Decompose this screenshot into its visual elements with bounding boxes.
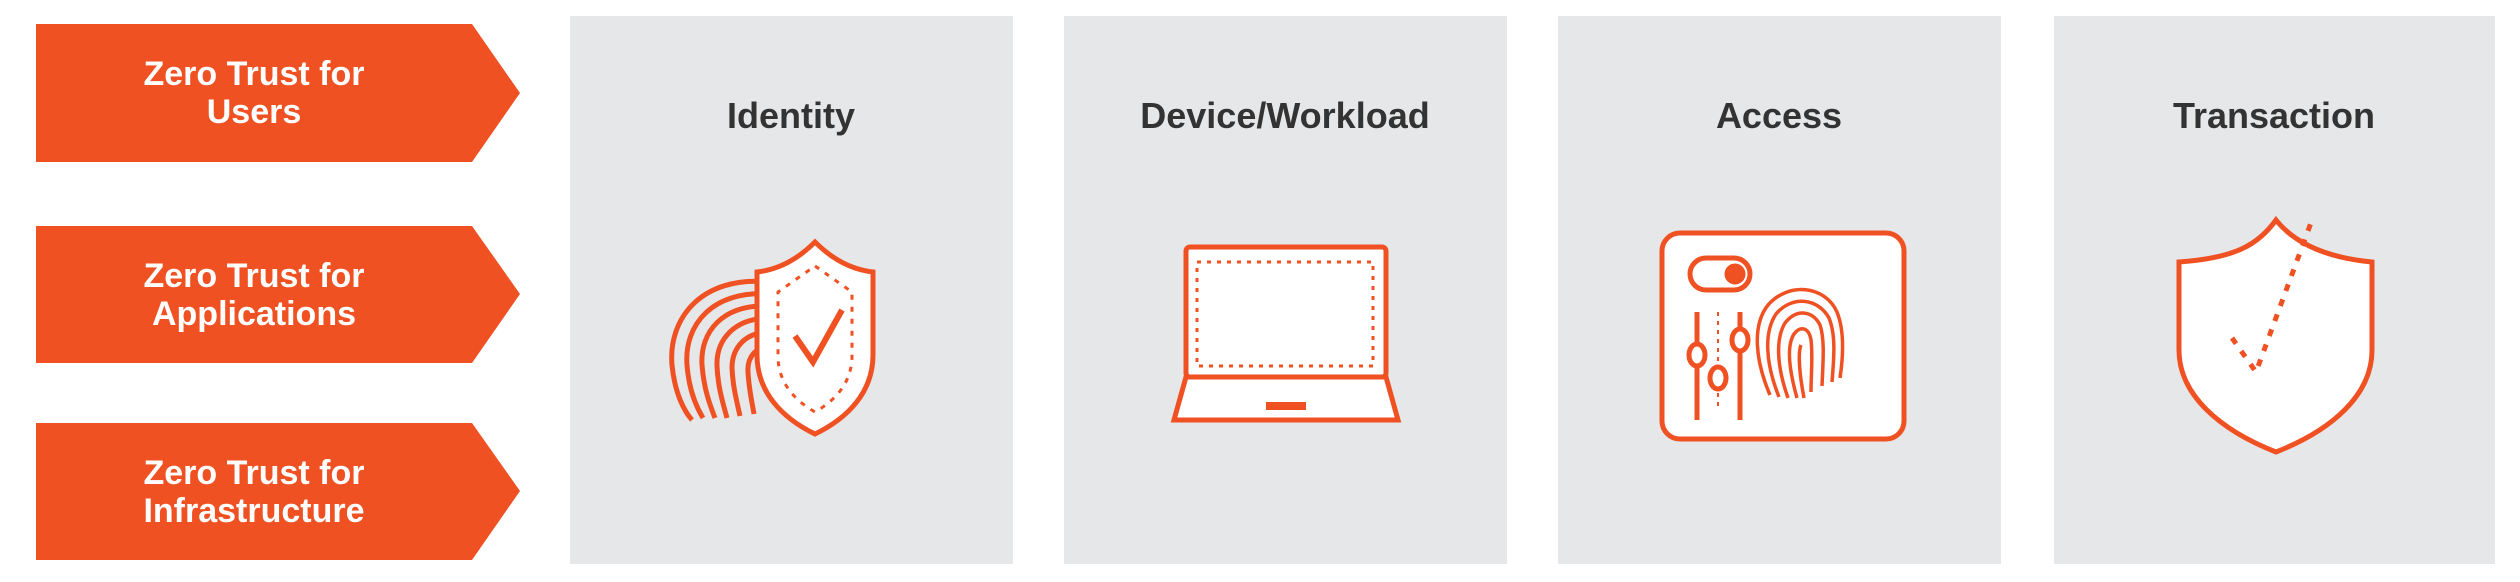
icon: laptop [1174,247,1398,420]
heading: Access: Access [1716,95,1842,136]
arrow: Zero Trust for Infrastructure: Zero Trust for [143,454,365,492]
arrow: Zero Trust for Applications: Zero Trust for [143,257,365,295]
arrow: Zero Trust for Infrastructure [36,423,520,560]
arrow: Zero Trust for Infrastructure: Infrastructure [143,492,365,530]
arrow: Zero Trust for Users: Users [207,93,301,131]
icon: shield with dotted check [2179,220,2372,452]
arrow: Zero Trust for Users [36,24,520,162]
panel: Identity [570,16,1013,564]
arrow: Zero Trust for Applications [36,226,520,363]
arrow: Zero Trust for Users: Zero Trust for [143,55,365,93]
panel: Transaction [2054,16,2495,564]
panel: Access [1558,16,2001,564]
heading: Identity: Identity [727,95,855,136]
icon: fingerprint and shield [672,242,873,434]
icon: access panel with toggles and fingerprint [1662,233,1904,439]
heading: Device/Workload: Device/Workload [1140,95,1430,136]
arrow: Zero Trust for Applications: Applications [152,295,356,333]
heading: Transaction: Transaction [2173,95,2375,136]
panel: Device/Workload [1064,16,1507,564]
